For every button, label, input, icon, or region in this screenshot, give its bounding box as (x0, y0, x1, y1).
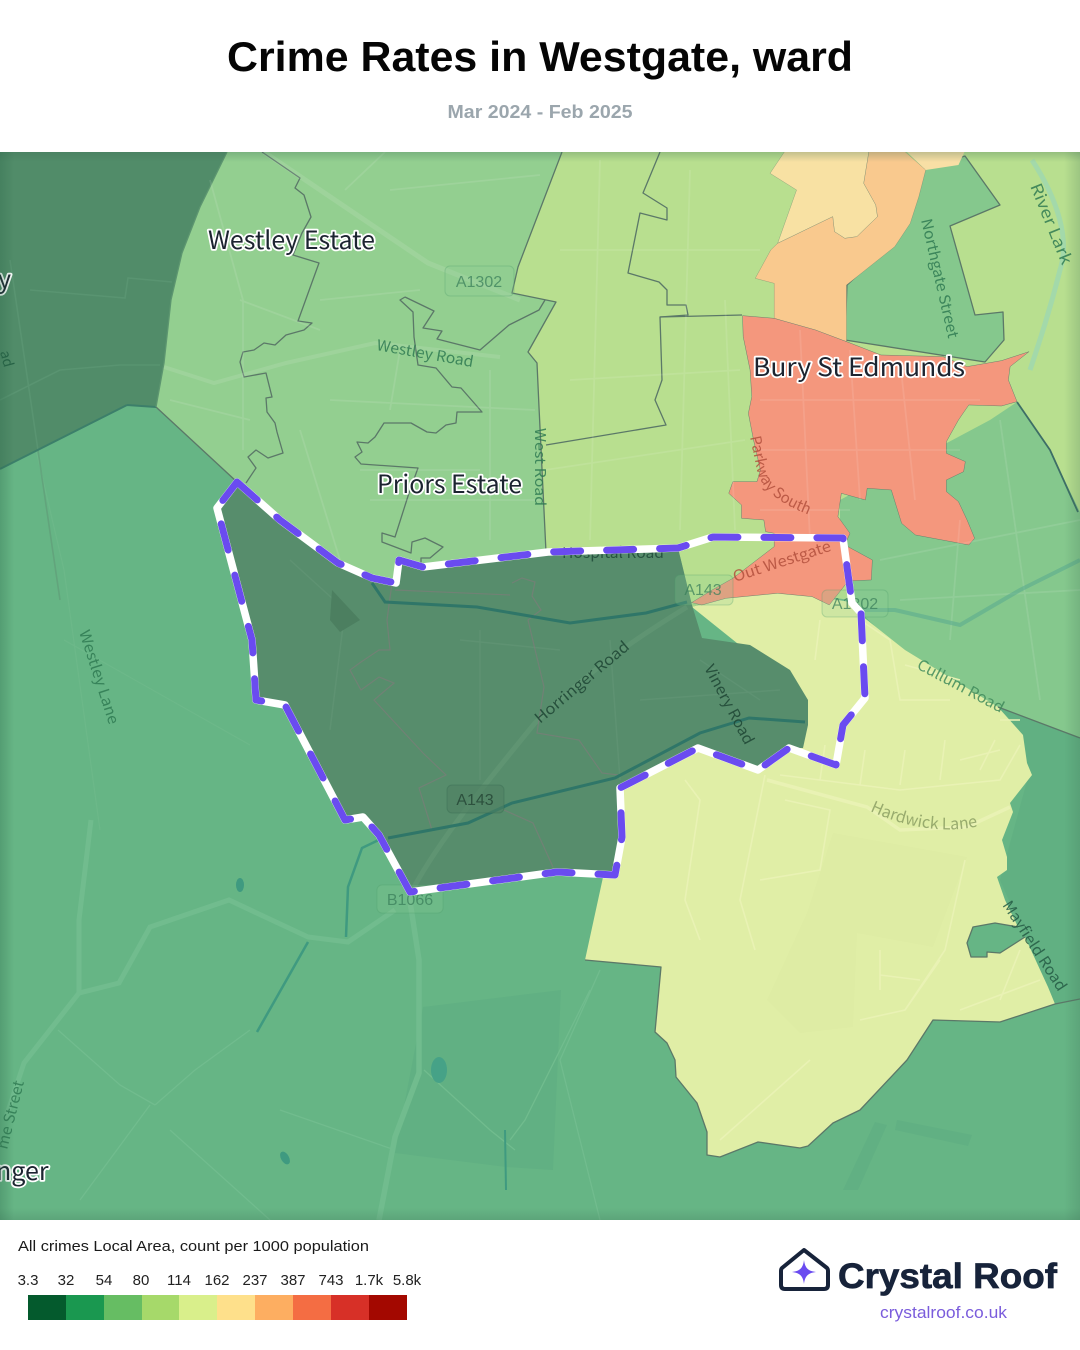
place labels: Westley Estate (208, 221, 375, 257)
district borders (0, 152, 1078, 563)
road shields (377, 266, 888, 913)
road labels: Out Westgate (730, 535, 834, 587)
area: pale orange zone (770, 152, 878, 243)
logo wordmark: Crystal Roof (838, 1257, 1057, 1296)
legend (18, 1238, 422, 1320)
ward interior detail (330, 578, 805, 867)
area: south-east green zone (1024, 718, 1080, 740)
legend scale labels: 114 (167, 1272, 191, 1289)
road labels: West Road (530, 428, 551, 506)
legend scale labels: 1.7k (355, 1272, 384, 1289)
road labels (0, 184, 1072, 1148)
road labels: Westley Lane (74, 627, 125, 727)
road shields: B1066 (387, 892, 433, 909)
legend scale labels: 80 (133, 1272, 149, 1289)
legend title: All crimes Local Area, count per 1000 population (18, 1238, 369, 1255)
area: south-west rural zone (0, 406, 1080, 1220)
road labels: Parkway South (750, 436, 810, 514)
road labels: Mayfield Road (998, 896, 1072, 995)
place labels: Priors Estate (377, 465, 522, 501)
area: north-west dark zone (0, 152, 227, 469)
legend scale labels: 3.3 (18, 1272, 38, 1289)
south-east green edge (998, 707, 1080, 738)
choropleth map (0, 152, 1080, 1220)
area: Northgate green zone (845, 156, 1004, 362)
road labels: Cullum Road (914, 654, 1008, 717)
area: Hospital corner zone (680, 555, 848, 607)
road shields: A143 (456, 792, 494, 809)
legend scale labels: 387 (280, 1272, 306, 1289)
icon: house with star (781, 1250, 828, 1289)
road shields: A1302 (456, 274, 502, 291)
place labels (0, 221, 965, 1188)
north-west zone faint lines (38, 450, 60, 600)
area: top pale tip (907, 152, 964, 170)
area: Bury St Edmunds red zone (692, 316, 1029, 605)
legend scale labels: 5.8k (393, 1272, 422, 1289)
place labels: Bury St Edmunds (753, 348, 965, 384)
legend scale labels: 32 (58, 1272, 74, 1289)
pale zone streets (685, 620, 1040, 1140)
road shields: A1302 (832, 596, 878, 613)
logo url: crystalroof.co.uk (880, 1304, 1008, 1322)
legend colour bar (28, 1295, 407, 1320)
logo: Crystal Roof (781, 1250, 1057, 1322)
street network texture (164, 152, 1080, 700)
legend scale labels: 54 (96, 1272, 112, 1289)
area: east green zone (840, 402, 1080, 740)
area: pale yellow south-east zone (585, 592, 1055, 1157)
road labels: Hospital Road (562, 542, 664, 563)
pale zone parkland patch (767, 833, 967, 1033)
ward fill: Westgate (217, 482, 808, 892)
area: orange zone (755, 152, 926, 342)
map edge shading (0, 152, 1080, 1220)
area: Westley Estate zone (156, 152, 562, 583)
ward outline (217, 482, 865, 892)
legend scale labels: 743 (318, 1272, 344, 1289)
road labels: Hardwick Lane (872, 801, 977, 830)
inlet border (967, 923, 1025, 957)
rivers north and east (860, 160, 1080, 625)
road labels: Northgate Street (916, 216, 964, 340)
title: Crime Rates in Westgate, ward (227, 33, 853, 80)
legend scale labels: 237 (242, 1272, 268, 1289)
road labels: River Lark (1025, 179, 1080, 268)
pale zone borders (585, 960, 1080, 1157)
road labels: Vinery Road (700, 660, 759, 748)
subtitle: date range: Mar 2024 - Feb 2025 (448, 101, 632, 122)
legend scale labels (18, 1272, 422, 1289)
road labels: Horringer Road (530, 636, 634, 728)
legend scale labels: 162 (204, 1272, 230, 1289)
area: northern yellow-green zone (512, 152, 1080, 560)
road labels: Westley Road (375, 334, 475, 372)
road shields: A143 (684, 582, 722, 599)
rural texture: fields, roads and streams (3, 820, 600, 1220)
